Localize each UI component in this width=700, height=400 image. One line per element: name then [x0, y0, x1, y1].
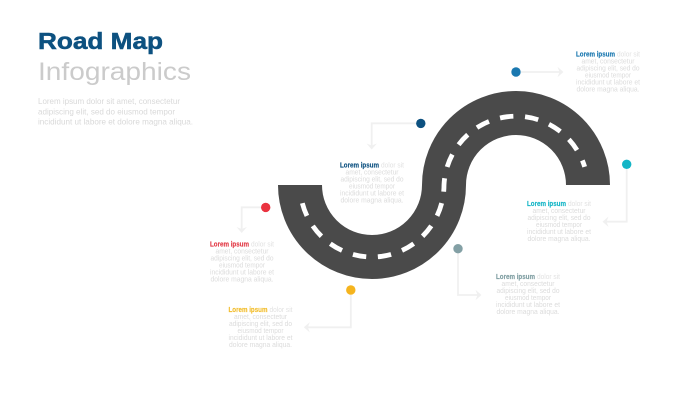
intro text block: incididunt ut labore et dolore magna aliqua. — [38, 116, 193, 126]
milestone: blue: dolor sit — [617, 50, 640, 58]
milestone: teal: adipiscing elit, sed do — [528, 213, 590, 222]
milestone: grey — [453, 244, 560, 316]
milestone: navy: amet, consectetur — [346, 168, 399, 176]
milestone: grey: incididunt ut labore et — [496, 300, 560, 309]
milestone: yellow: amet, consectetur — [234, 312, 287, 321]
milestone: blue: amet, consectetur — [582, 56, 635, 66]
milestone: red: adipiscing elit, sed do — [210, 254, 274, 262]
milestone: grey: Lorem ipsum — [496, 272, 535, 281]
milestone: blue: eiusmod tempor — [585, 70, 631, 80]
milestone: navy: eiusmod tempor — [349, 182, 395, 190]
milestone: blue: adipiscing elit, sed do — [576, 64, 640, 72]
milestone: teal: incididunt ut labore et — [527, 227, 591, 236]
milestone: grey: dolor sit — [537, 272, 560, 281]
milestone: yellow: eiusmod tempor — [238, 326, 284, 335]
milestone: navy — [340, 119, 425, 204]
milestone: navy: dolore magna aliqua. — [340, 196, 404, 204]
milestone: teal: amet, consectetur — [532, 206, 586, 215]
milestone: blue — [511, 50, 640, 94]
milestone: grey: adipiscing elit, sed do — [496, 286, 560, 295]
intro text block — [38, 96, 193, 126]
milestone: blue: Lorem ipsum — [576, 50, 615, 58]
milestone: red: dolor sit — [251, 240, 274, 248]
milestone: navy: adipiscing elit, sed do — [340, 174, 404, 184]
milestone: yellow: adipiscing elit, sed do — [229, 319, 292, 328]
milestone: red: incididunt ut labore et — [210, 268, 274, 276]
milestone: navy: dolor sit — [381, 160, 404, 170]
milestone: navy: incididunt ut labore et — [340, 188, 404, 198]
intro text block: adipiscing elit, sed do eiusmod tempor — [38, 106, 175, 116]
milestone: red: Lorem ipsum — [210, 240, 249, 248]
milestone: navy: Lorem ipsum — [340, 160, 379, 170]
title: Road Map — [38, 28, 163, 54]
intro text block: Lorem ipsum dolor sit amet, consectetur — [38, 96, 180, 106]
milestone: yellow: dolor sit — [270, 305, 292, 314]
milestone: red: amet, consectetur — [216, 246, 269, 256]
milestone: teal: dolor sit — [568, 199, 591, 208]
milestone: blue: dolore magna aliqua. — [576, 84, 640, 94]
title: Infographics — [38, 58, 191, 86]
milestone: yellow: dolore magna aliqua. — [229, 340, 292, 349]
milestone: teal: Lorem ipsum — [527, 199, 566, 208]
title — [38, 28, 191, 86]
milestone: teal — [527, 160, 631, 243]
milestone: blue: incididunt ut labore et — [576, 78, 640, 86]
milestone: teal: dolore magna aliqua. — [528, 234, 590, 243]
milestone: yellow: incididunt ut labore et — [228, 333, 292, 342]
milestone: grey: eiusmod tempor — [505, 293, 551, 302]
road — [300, 113, 588, 257]
milestone: red: dolore magna aliqua. — [210, 274, 274, 284]
milestone: red — [210, 203, 274, 284]
milestone: teal: eiusmod tempor — [536, 220, 582, 229]
milestone: grey: amet, consectetur — [502, 279, 555, 288]
milestone: yellow: Lorem ipsum — [228, 305, 268, 314]
milestone: red: eiusmod tempor — [219, 260, 265, 270]
milestone: grey: dolore magna aliqua. — [496, 307, 560, 316]
milestone: yellow — [228, 285, 355, 349]
